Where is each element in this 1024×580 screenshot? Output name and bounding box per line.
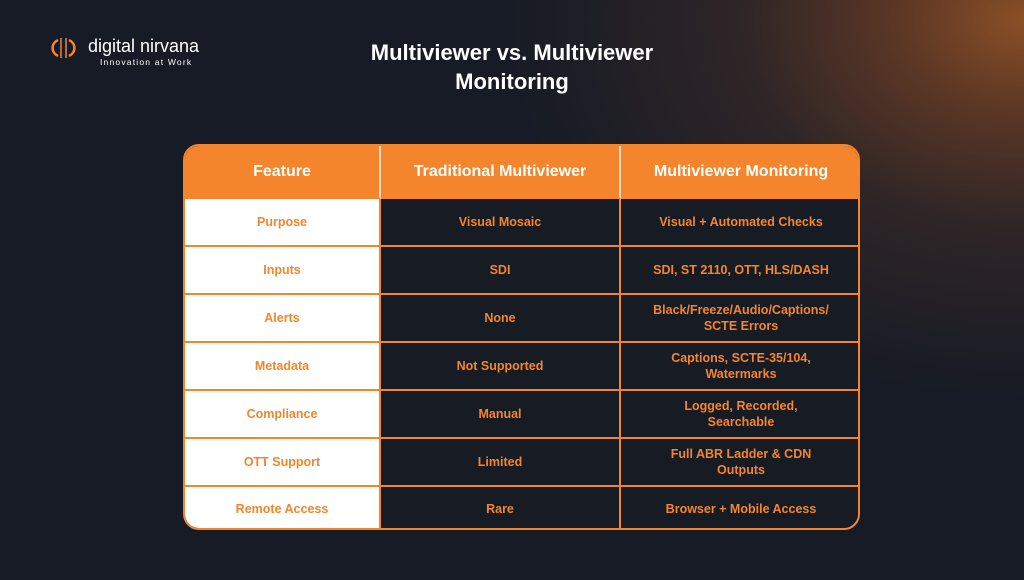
table: Visual + Automated Checks — [659, 215, 823, 229]
table: Purpose — [257, 215, 307, 229]
table: SDI, ST 2110, OTT, HLS/DASH — [653, 263, 829, 277]
table — [183, 144, 860, 530]
table: Metadata — [255, 359, 309, 373]
table: Captions, SCTE-35/104, — [671, 351, 811, 365]
title: Multiviewer vs. Multiviewer — [371, 40, 653, 65]
table: Feature — [253, 162, 311, 180]
table: Inputs — [263, 263, 301, 277]
table: None — [484, 311, 516, 325]
icon: logo mark — [51, 38, 76, 58]
table: Manual — [478, 407, 522, 421]
table: Not Supported — [457, 359, 543, 373]
table: Watermarks — [705, 367, 777, 381]
logo: Innovation at Work — [100, 57, 192, 67]
table: Rare — [486, 502, 514, 516]
table: OTT Support — [244, 455, 320, 469]
table: Compliance — [247, 407, 317, 421]
table: Full ABR Ladder & CDN — [671, 447, 811, 461]
table: Visual Mosaic — [459, 215, 541, 229]
title: Monitoring — [455, 69, 569, 94]
table: Limited — [478, 455, 522, 469]
table: Black/Freeze/Audio/Captions/ — [653, 303, 829, 317]
table: Traditional Multiviewer — [414, 162, 586, 180]
table: Logged, Recorded, — [684, 399, 798, 413]
logo: digital nirvana — [88, 36, 199, 56]
table: Outputs — [717, 463, 765, 477]
table: Multiviewer Monitoring — [654, 162, 828, 180]
table: SCTE Errors — [704, 319, 778, 333]
table: Alerts — [264, 311, 300, 325]
table: SDI — [490, 263, 510, 277]
title — [371, 40, 653, 94]
table: Remote Access — [236, 502, 328, 516]
table: Searchable — [708, 415, 774, 429]
logo — [51, 36, 199, 67]
table: Browser + Mobile Access — [666, 502, 816, 516]
